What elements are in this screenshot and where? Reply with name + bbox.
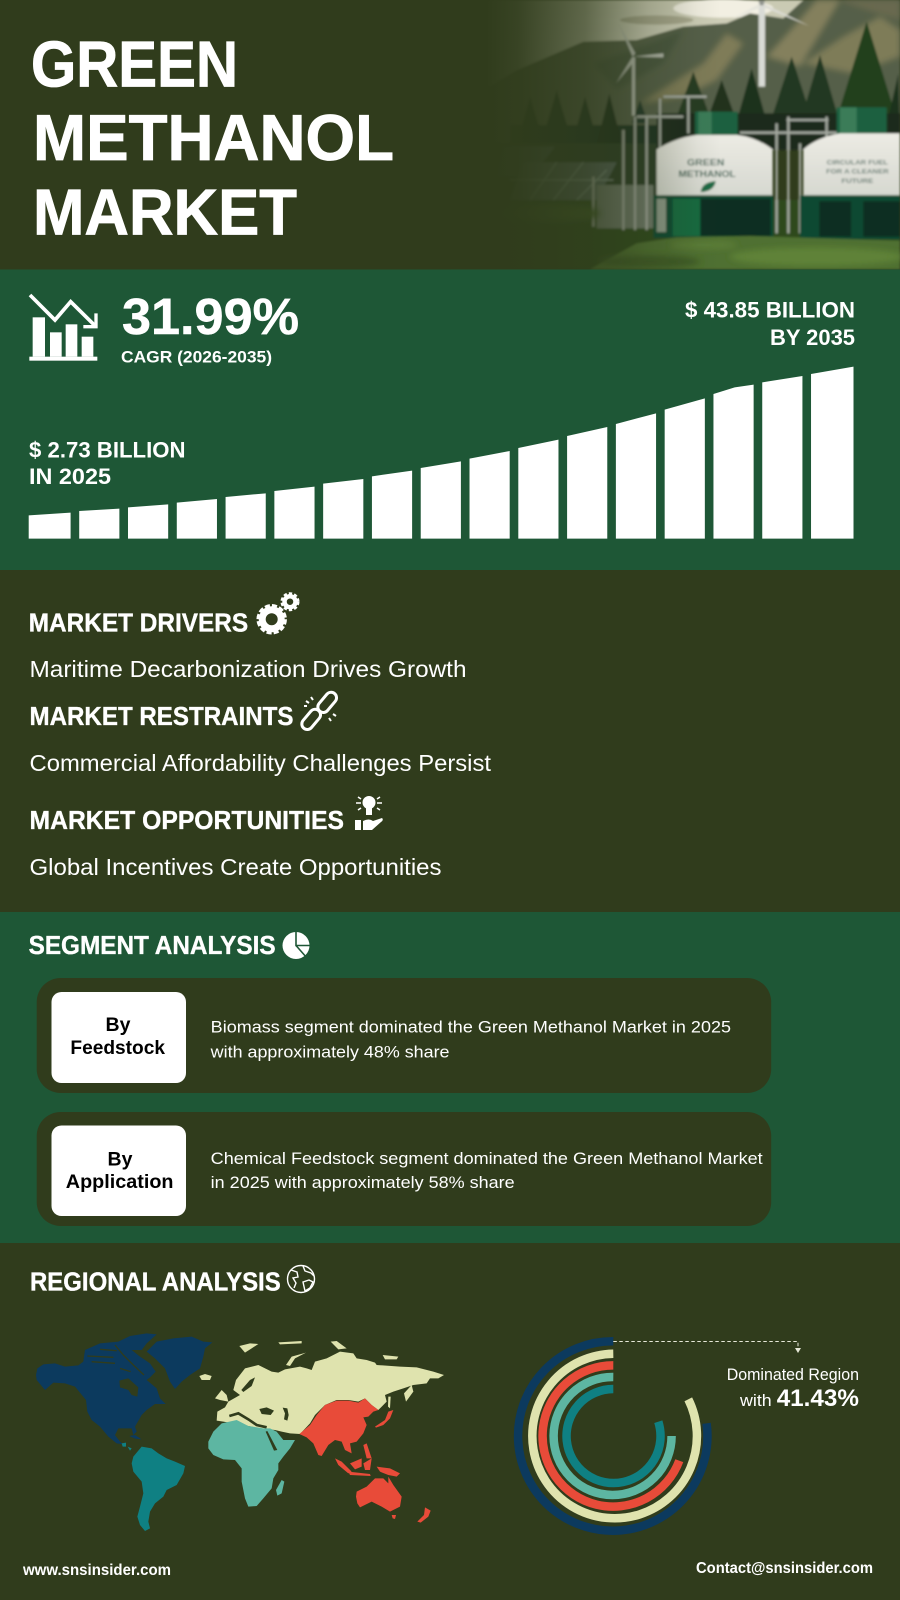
callout: dominated region: 41.43% [777,1385,859,1412]
panel: market dynamics [0,570,900,912]
callout: dominated region: Dominated Region [727,1366,859,1384]
icon: pie chart [282,930,312,959]
icon: broken chain [300,690,339,732]
value 2035: BY 2035 [770,325,855,350]
card: by feedstock: Feedstock [70,1037,165,1059]
icon: chart with trend arrow [29,295,97,361]
heading: segment analysis: SEGMENT ANALYSIS [29,932,276,960]
map: Asia Pacific [299,1398,431,1523]
card: by application: Chemical Feedstock segment dominated the Green Methanol Market [211,1149,763,1168]
world map [36,1333,444,1531]
storage tank: circular fuel [800,107,900,239]
value 2035 [685,298,855,350]
icon: gears [258,594,298,633]
card: by application: in 2025 with approximately 58% share [211,1173,515,1192]
map: Europe and Russia [199,1341,444,1434]
card: by feedstock: with approximately 48% share [210,1043,450,1062]
map: Africa and Middle East [208,1420,295,1507]
map: South America [122,1443,185,1531]
card: by feedstock [37,978,771,1093]
storage tank: circular fuel: CIRCULAR FUEL [827,159,888,166]
panel: market size and CAGR [0,270,900,570]
value 2025: $ 2.73 BILLION [29,438,186,463]
heading: market drivers: MARKET DRIVERS [29,610,248,638]
panel: segment analysis [0,912,900,1243]
arrow: dashed leader [613,1342,801,1353]
card: by application: Application [66,1171,174,1193]
icon: lightbulb in hand [355,796,383,830]
title [31,28,394,248]
callout: dominated region [727,1366,859,1412]
title: MARKET [33,176,297,248]
value 2025 [29,438,186,489]
storage tank: green methanol: METHANOL [678,169,736,179]
card: by application: By [108,1149,133,1171]
CAGR value: 31.99% [122,288,299,345]
heading: regional analysis: REGIONAL ANALYSIS [30,1269,281,1297]
panel: regional analysis [0,1243,900,1600]
value 2025: IN 2025 [29,464,111,489]
panel: header [0,0,900,270]
card: by feedstock: Biomass segment dominated the Green Methanol Market in 2025 [211,1018,731,1037]
CAGR label: CAGR (2026-2035) [121,348,272,367]
icon: globe [288,1266,314,1292]
card: by feedstock: By [106,1014,131,1036]
storage tank: circular fuel: FOR A CLEANER [826,169,889,176]
value 2035: $ 43.85 BILLION [685,298,855,323]
text: restraints: Commercial Affordability Challenges Persist [30,750,491,776]
heading: market restraints: MARKET RESTRAINTS [30,703,294,731]
heading: market opportunities: MARKET OPPORTUNITIES [30,807,344,835]
callout: dominated region: with [739,1392,772,1410]
text: drivers: Maritime Decarbonization Drives Growth [30,656,466,682]
storage tank: circular fuel: FUTURE [841,178,873,185]
footer: contact: Contact@snsinsider.com [696,1560,873,1577]
bar chart: growth [29,367,854,539]
map: North America [36,1333,212,1444]
footer: website: www.snsinsider.com [22,1562,171,1579]
text: opportunities: Global Incentives Create Opportunities [30,854,442,880]
storage tank: green methanol [653,112,773,238]
turbine: left [617,40,665,117]
donut chart: regional share [518,1341,707,1531]
storage tank: green methanol: GREEN [687,158,724,168]
title: GREEN [31,28,238,101]
turbine: right [748,0,807,88]
card: by application [37,1112,771,1226]
photo: green methanol plant with mountains [518,0,900,270]
title: METHANOL [33,101,394,174]
